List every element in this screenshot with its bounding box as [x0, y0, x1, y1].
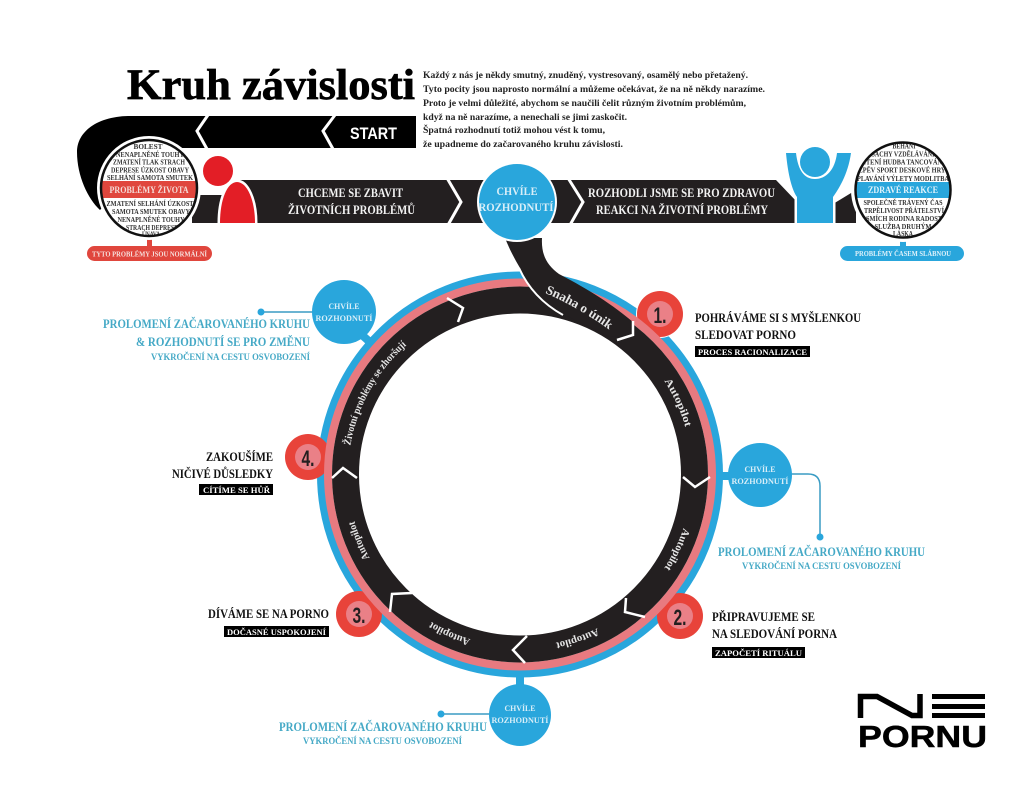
magnifier: life problems: NENAPLNĚNÉ TOUHY — [118, 214, 185, 224]
magnifier: healthy reactions: ZPĚV SPORT DESKOVÉ HRY — [858, 164, 946, 174]
step 2 badge: 2. — [674, 605, 686, 630]
callout: break the circle bottom: PROLOMENÍ ZAČAROVANÉHO KRUHU — [279, 720, 487, 734]
decision circle: upper left: CHVÍLE — [328, 301, 360, 311]
ring labels: Autopilot — [664, 380, 690, 427]
intro text block: že upadneme do začarovaného kruhu závislosti. — [423, 140, 623, 150]
magnifier: healthy reactions: ŠACHY VZDĚLÁVÁNÍ — [872, 148, 935, 158]
chevrons — [332, 298, 710, 663]
logo: PORNU — [858, 719, 987, 754]
magnifier: healthy reactions: LÁSKA — [893, 228, 913, 238]
intro text block — [423, 71, 765, 150]
intro text block: Každý z nás je někdy smutný, znuděný, vystresovaný, osamělý nebo přetažený. — [423, 71, 748, 81]
callout: break the circle and decide: & ROZHODNUTÍ SE PRO ZMĚNU — [136, 335, 310, 349]
label: step 3: DÍVÁME SE NA PORNO — [208, 607, 329, 621]
label: step 2: ZAPOČETÍ RITUÁLU — [715, 648, 802, 658]
magnifier: life problems: ÚNAVA — [142, 228, 160, 238]
label: step 1: SLEDOVAT PORNO — [695, 328, 796, 342]
decision circle: upper left: ROZHODNUTÍ — [316, 313, 373, 323]
ring labels: Snaha o únik — [546, 286, 612, 330]
step 1 badge: 1. — [654, 303, 666, 328]
decision band — [192, 178, 856, 225]
decision band: ROZHODLI JSME SE PRO ZDRAVOU — [588, 186, 775, 200]
callout: break the circle right: VYKROČENÍ NA CESTU OSVOBOZENÍ — [742, 561, 901, 571]
decision band: CHCEME SE ZBAVIT — [298, 186, 404, 200]
label: step 4: NIČIVÉ DŮSLEDKY — [172, 466, 273, 481]
central decision circle: ROZHODNUTÍ — [478, 200, 554, 214]
label: step 2: NA SLEDOVÁNÍ PORNA — [712, 627, 837, 641]
label: step 1: POHRÁVÁME SI S MYŠLENKOU — [695, 311, 861, 325]
label: step 3: DOČASNÉ USPOKOJENÍ — [227, 627, 327, 637]
step 3 badge — [336, 591, 382, 637]
magnifier: healthy reactions: ČTENÍ HUDBA TANCOVÁNÍ — [862, 156, 945, 166]
callout: break the circle and decide: PROLOMENÍ ZAČAROVANÉHO KRUHU — [103, 317, 310, 331]
magnifier: healthy reactions: PLAVÁNÍ VÝLETY MODLITBA — [857, 173, 949, 183]
step 4 badge: 4. — [302, 446, 314, 471]
magnifier: healthy reactions: BĚHÁNÍ — [892, 140, 916, 150]
pill: problems weaken — [840, 246, 964, 261]
step 1 badge — [636, 290, 684, 338]
decision band: ŽIVOTNÍCH PROBLÉMŮ — [288, 202, 415, 217]
ring labels: Autopilot — [429, 622, 470, 645]
magnifier: healthy reactions: ZDRAVÉ REAKCE — [868, 185, 938, 195]
magnifier: healthy reactions: TRPĚLIVOST PŘÁTELSTVÍ — [864, 205, 944, 215]
decision circle: right: CHVÍLE — [744, 464, 776, 474]
magnifier: life problems: STRACH DEPRESE — [126, 223, 178, 232]
main ring diagram — [285, 238, 723, 678]
decision circle: bottom: ROZHODNUTÍ — [492, 715, 549, 725]
magnifier: life problems: SAMOTA SMUTEK OBAVY — [112, 207, 190, 216]
intro text block: když na ně narazíme, a nenechali se jimi zaskočit. — [423, 113, 627, 123]
intro text block: Špatná rozhodnutí totiž mohou vést k tomu, — [423, 123, 605, 136]
magnifier: life problems: BOLEST — [134, 142, 162, 151]
decision circle: upper left — [258, 280, 376, 344]
callout: break the circle right — [718, 545, 925, 571]
label: step 2 — [712, 610, 837, 658]
magnifier: healthy reactions — [851, 138, 955, 248]
intro text block: Tyto pocity jsou naprosto normální a můžeme očekávat, že na ně někdy narazíme. — [423, 84, 765, 95]
label: step 4 — [172, 450, 273, 495]
decision circle: bottom — [438, 676, 551, 746]
callout: break the circle and decide: VYKROČENÍ NA CESTU OSVOBOZENÍ — [151, 352, 310, 362]
logo — [858, 694, 987, 754]
callout: break the circle bottom — [279, 720, 487, 746]
label: step 2: PŘIPRAVUJEME SE — [712, 610, 815, 624]
pill: problems are normal — [87, 246, 212, 261]
callout: break the circle and decide — [103, 317, 310, 362]
step 3 badge: 3. — [352, 603, 366, 628]
label: step 1: PROCES RACIONALIZACE — [698, 347, 807, 357]
title: Kruh závislosti — [127, 62, 415, 109]
callout: break the circle right: PROLOMENÍ ZAČAROVANÉHO KRUHU — [718, 545, 925, 559]
decision circle: right: ROZHODNUTÍ — [732, 476, 789, 486]
ring labels: Autopilot — [556, 628, 598, 648]
magnifier: life problems: ZMATENÍ SELHÁNÍ ÚZKOST — [106, 198, 194, 208]
icon: red person — [199, 152, 255, 223]
ring labels: Autopilot — [664, 528, 690, 570]
step 4 badge — [285, 434, 331, 480]
decision circle: bottom: CHVÍLE — [504, 703, 536, 713]
pill: problems weaken: PROBLÉMY ČASEM SLÁBNOU — [855, 250, 951, 258]
step 2 badge — [657, 593, 703, 639]
pill: problems are normal: TYTO PROBLÉMY JSOU NORMÁLNÍ — [92, 250, 207, 258]
label: step 4: ZAKOUŠÍME — [206, 450, 273, 464]
start arrow band: START — [350, 124, 398, 143]
decision circle: right — [722, 443, 824, 540]
ring labels: Autopilot — [349, 521, 370, 559]
ring labels — [342, 286, 690, 648]
decision band: REAKCI NA ŽIVOTNÍ PROBLÉMY — [596, 203, 768, 217]
magnifier: life problems: PROBLÉMY ŽIVOTA — [110, 185, 189, 195]
label: step 1 — [695, 311, 861, 357]
central decision circle — [477, 162, 557, 242]
label: step 3 — [208, 607, 329, 637]
ring labels: Životní problémy se zhoršují — [342, 340, 406, 446]
start arrow band — [77, 115, 416, 210]
intro text block: Proto je velmi důležité, abychom se naučili čelit různým životním problémům, — [423, 98, 746, 109]
magnifier: life problems: NENAPLNĚNÉ TOUHY — [116, 149, 184, 159]
icon: blue person with raised arms — [786, 147, 851, 223]
magnifier: life problems: DEPRESE ÚZKOST OBAVY — [111, 164, 189, 174]
magnifier: healthy reactions: SMÍCH RODINA RADOST — [866, 213, 942, 223]
magnifier: life problems — [97, 136, 201, 248]
magnifier: healthy reactions: SLUŽBA DRUHÝM — [874, 221, 932, 231]
magnifier: life problems: SELHÁNÍ SAMOTA SMUTEK — [107, 172, 193, 182]
escape curve — [505, 238, 633, 337]
magnifier: life problems: ZMATENÍ TLAK STRACH — [113, 156, 185, 166]
magnifier: healthy reactions: SPOLEČNĚ TRÁVENÝ ČAS — [864, 197, 942, 207]
label: step 4: CÍTÍME SE HŮŘ — [203, 485, 271, 495]
central decision circle: CHVÍLE — [496, 184, 538, 198]
callout: break the circle bottom: VYKROČENÍ NA CESTU OSVOBOZENÍ — [303, 736, 462, 746]
